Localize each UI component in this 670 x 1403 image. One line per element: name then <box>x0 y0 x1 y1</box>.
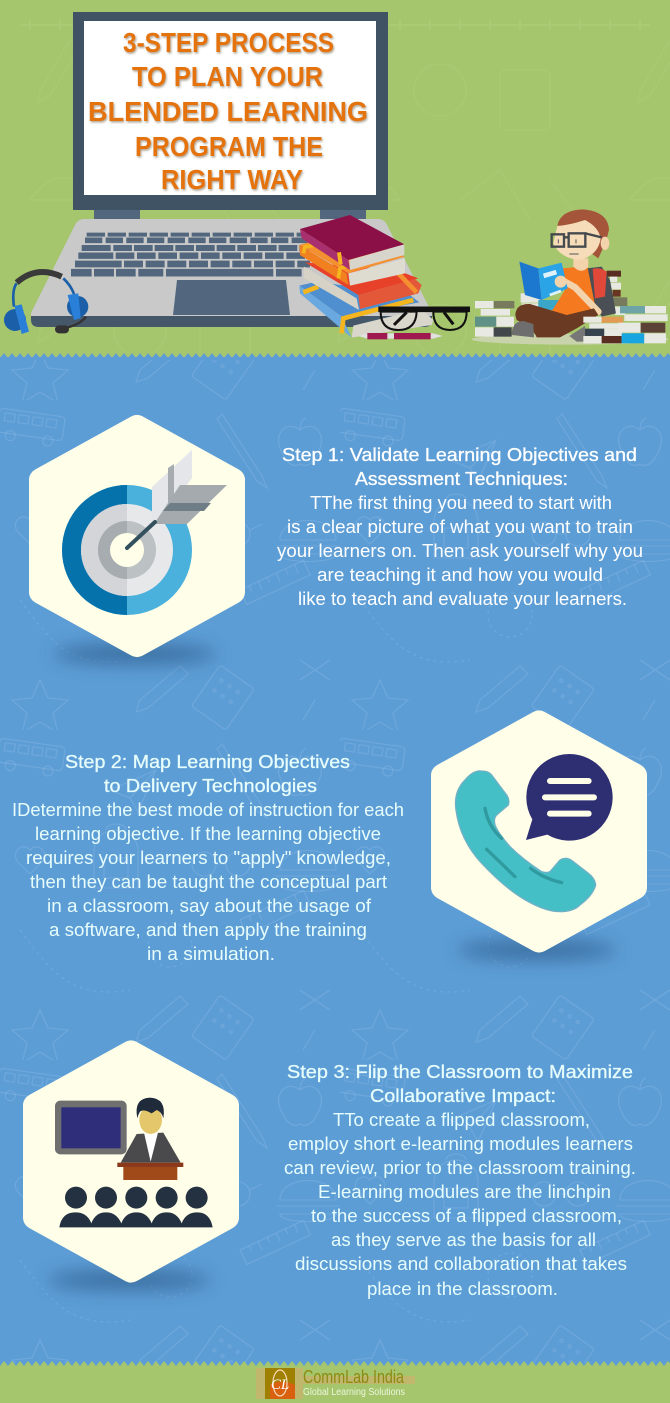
trackpad <box>173 280 290 315</box>
step 1 body <box>277 492 643 609</box>
step 3 body: E-learning modules are the linchpin <box>318 1181 611 1202</box>
hexagon <box>443 722 635 940</box>
logo mark: CL <box>271 1377 289 1393</box>
text: step 3 <box>284 1061 636 1299</box>
step 2 body: in a simulation. <box>147 943 275 964</box>
title on laptop screen <box>84 21 376 195</box>
step 2 body: a software, and then apply the training <box>49 919 367 940</box>
logo: CommLab India <box>256 1367 415 1399</box>
hexagon <box>35 1052 227 1270</box>
blackboard <box>55 1101 127 1154</box>
back book stack <box>521 271 627 315</box>
left book stack <box>475 301 514 337</box>
logo mark <box>265 1368 295 1399</box>
title line 3: BLENDED LEARNING <box>88 96 368 127</box>
stack of books <box>299 215 470 339</box>
step 2 body: in a classroom, say about the usage of <box>47 895 372 916</box>
step 1 heading: Step 1: Validate Learning Objectives and <box>282 444 637 465</box>
panel: step 3 icon <box>35 1052 227 1290</box>
step 3 body: place in the classroom. <box>367 1278 558 1299</box>
laptop <box>31 12 432 327</box>
open book <box>519 262 568 300</box>
step 3 body: to the success of a flipped classroom, <box>311 1205 622 1226</box>
title line 5: RIGHT WAY <box>161 164 303 195</box>
icon: phone and speech bubble <box>455 754 613 912</box>
step 2 body <box>12 799 404 964</box>
text: step 1 <box>277 444 643 609</box>
step 1 body: TThe first thing you need to start with <box>310 492 612 513</box>
logo wordmark: CommLab India <box>303 1367 405 1387</box>
neck <box>573 258 588 271</box>
step 1 heading <box>282 444 637 489</box>
step 2 heading: to Delivery Technologies <box>104 775 317 796</box>
audience <box>59 1187 213 1227</box>
background: green header <box>0 0 670 358</box>
arm <box>562 280 598 312</box>
shoes <box>512 321 534 337</box>
blue book <box>299 282 433 338</box>
hexagon shadow <box>457 940 617 960</box>
title line 1: 3-STEP PROCESS <box>123 27 334 58</box>
step 1 body: your learners on. Then ask yourself why you <box>277 540 643 561</box>
hexagon shadow <box>47 1270 211 1290</box>
podium <box>117 1163 183 1180</box>
step 3 heading: Step 3: Flip the Classroom to Maximize <box>287 1061 633 1082</box>
right book stack <box>583 306 668 343</box>
hexagon shadow <box>53 644 217 664</box>
logo tagline: Global Learning Solutions <box>303 1386 405 1398</box>
purple book <box>300 215 404 270</box>
title line 4: PROGRAM THE <box>135 131 323 162</box>
step 1 body: is a clear picture of what you want to train <box>287 516 633 537</box>
screen white panel <box>84 21 376 195</box>
step 3 body: employ short e-learning modules learners <box>288 1133 633 1154</box>
step 3 body: discussions and collaboration that takes <box>295 1253 627 1274</box>
eyeglasses <box>378 309 470 330</box>
step 2 body: IDetermine the best mode of instruction for each <box>12 799 404 820</box>
text: step 2 <box>12 751 404 964</box>
teacher <box>121 1098 181 1163</box>
backpack strap <box>593 268 607 298</box>
panel: step 1 icon <box>41 427 233 664</box>
footer band <box>0 1361 670 1403</box>
pen <box>358 333 443 339</box>
step 1 body: are teaching it and how you would <box>317 564 603 585</box>
red book <box>304 262 422 310</box>
panel: step 2 icon <box>443 722 635 960</box>
background: blue body <box>0 353 670 1363</box>
step 1 body: like to teach and evaluate your learners. <box>298 588 627 609</box>
step 2 body: learning objective. If the learning objective <box>35 823 381 844</box>
icon: teacher and audience <box>55 1098 213 1227</box>
step 2 body: then they can be taught the conceptual part <box>30 871 387 892</box>
headphones <box>4 272 88 334</box>
step 3 body: can review, prior to the classroom training. <box>284 1157 636 1178</box>
laptop base edge <box>31 316 432 327</box>
step 3 body: as they serve as the basis for all <box>331 1229 596 1250</box>
glasses <box>552 233 602 247</box>
step 3 body <box>284 1109 636 1299</box>
step 1 heading: Assessment Techniques: <box>355 468 568 489</box>
step 2 heading: Step 2: Map Learning Objectives <box>65 751 350 772</box>
shirt <box>548 266 595 317</box>
face <box>553 220 601 260</box>
orange book <box>299 232 405 286</box>
screen hinges <box>94 210 366 219</box>
hair back and ear <box>557 209 609 258</box>
floor shadow <box>472 334 668 345</box>
step 3 body: TTo create a flipped classroom, <box>333 1109 590 1130</box>
hexagon <box>41 427 233 645</box>
logo tan backing <box>256 1368 415 1399</box>
step 3 heading <box>287 1061 633 1106</box>
student reading with books <box>472 209 668 345</box>
step 2 heading <box>65 751 350 796</box>
hero illustration <box>4 12 668 345</box>
step 2 body: requires your learners to "apply" knowledge, <box>26 847 391 868</box>
backpack <box>587 267 616 317</box>
hand <box>555 276 567 288</box>
keyboard <box>71 235 310 273</box>
laptop base <box>31 219 432 327</box>
eyes and mouth <box>558 239 579 254</box>
title line 2: TO PLAN YOUR <box>132 61 323 92</box>
step 3 heading: Collaborative Impact: <box>370 1085 556 1106</box>
legs <box>515 304 598 337</box>
icon: target with arrow <box>62 450 227 615</box>
laptop screen bezel <box>73 12 388 210</box>
